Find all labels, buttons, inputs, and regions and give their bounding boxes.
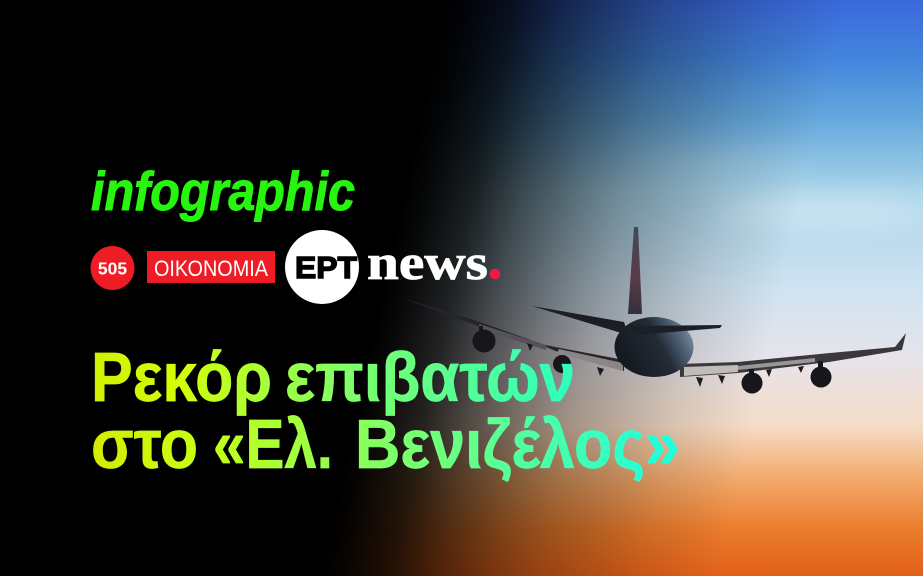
left stabilizer [532, 306, 628, 334]
tail fin [628, 227, 642, 314]
title line 1: επιβατών [285, 338, 575, 416]
fuselage [614, 317, 694, 377]
title line 2: στο [91, 405, 198, 483]
left wing [402, 298, 624, 371]
badge: category ΟΙΚΟΝΟΜΙΑ: ΟΙΚΟΝΟΜΙΑ [154, 256, 268, 281]
title [91, 338, 680, 483]
right stabilizer [630, 325, 722, 335]
badge: issue number 505 [90, 246, 134, 290]
logo: ΕΡΤ news: ΕΡΤ [295, 250, 357, 285]
engines [472, 326, 832, 394]
title line 2: «Ελ. [213, 405, 333, 483]
right wing [680, 333, 906, 377]
title line 1 [91, 338, 575, 416]
logo: ΕΡΤ news [285, 230, 500, 304]
flap fairings [527, 343, 804, 387]
title line 1: Ρεκόρ [91, 338, 272, 416]
airplane [402, 227, 906, 394]
title line 2 [91, 405, 680, 483]
title line 2: Βενιζέλος» [355, 405, 680, 483]
label: infographic: infographic [91, 160, 355, 222]
logo: ΕΡΤ news: news [367, 234, 488, 290]
badge: issue number 505: 505 [98, 258, 127, 278]
